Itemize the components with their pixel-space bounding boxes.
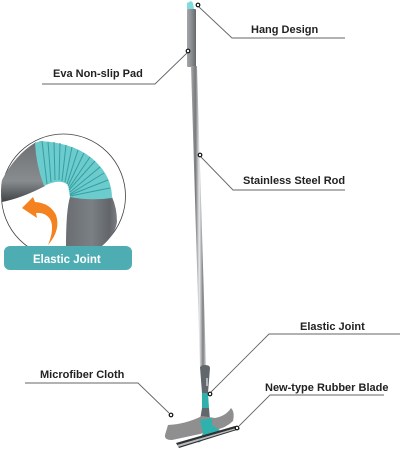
mop product (165, 1, 240, 448)
callout markers (169, 3, 239, 430)
lower grey tube (66, 197, 117, 246)
inset: elastic joint detail (1, 134, 132, 270)
inset circle (2, 134, 126, 258)
upper grey tube (1, 142, 45, 202)
label: microfiber cloth: Microfiber Cloth (40, 369, 125, 381)
teal bellows (35, 141, 112, 199)
blade holder (198, 418, 220, 443)
elastic joint (202, 393, 209, 408)
label: new-type rubber blade: New-type Rubber Blade (265, 382, 388, 394)
label: eva non-slip pad: Eva Non-slip Pad (53, 68, 143, 80)
mop rod (191, 66, 206, 366)
label: hang design: Hang Design (251, 24, 319, 36)
mop hang tip (187, 1, 194, 9)
label: elastic joint: Elastic Joint (300, 321, 365, 333)
mop lower handle (200, 365, 210, 393)
microfiber cloth (165, 408, 234, 440)
mop grip (187, 9, 196, 67)
elastic joint banner: Elastic Joint (33, 254, 101, 266)
label: stainless steel rod: Stainless Steel Rod (243, 175, 345, 187)
orange arrow (22, 197, 57, 245)
rubber blade (176, 426, 240, 448)
